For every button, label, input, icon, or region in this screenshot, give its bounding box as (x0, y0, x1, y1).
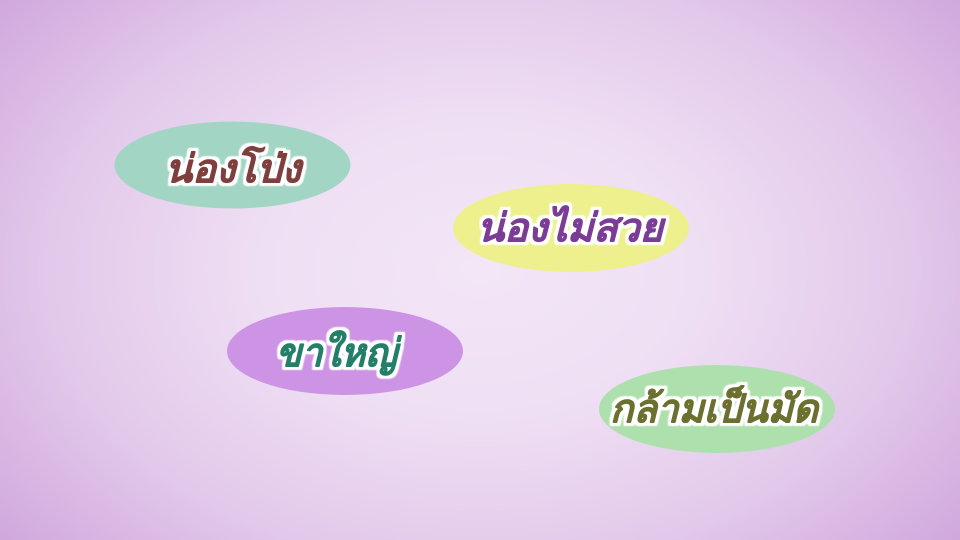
label: big legs: ขาใหญ่ (276, 330, 403, 376)
label: unattractive calves: น่องไม่สวย (477, 205, 666, 250)
label: slender calves: น่องโป่ง (165, 145, 304, 191)
label: bulging muscles: กล้ามเป็นมัด (610, 385, 821, 431)
label: unattractive calves (453, 184, 689, 272)
label: bulging muscles (599, 365, 835, 453)
label: slender calves (114, 122, 350, 208)
label: big legs (227, 307, 463, 395)
